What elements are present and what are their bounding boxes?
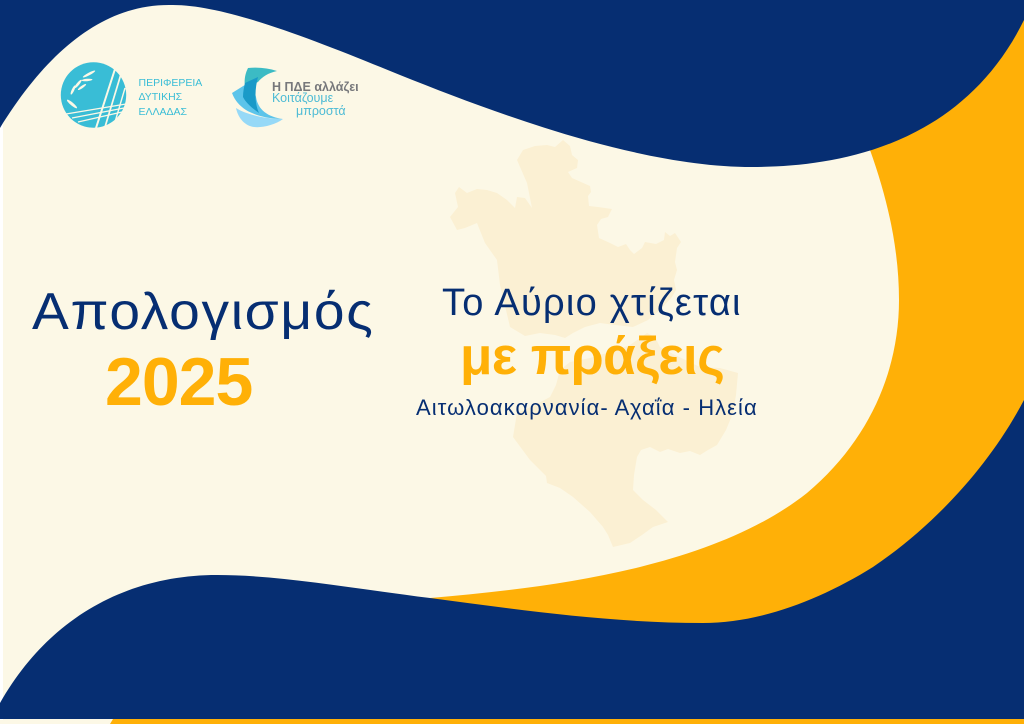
orange band — [430, 0, 1024, 660]
navy top wave — [0, 0, 1024, 167]
heading: 2025: 2025 — [105, 344, 252, 420]
text: logo slogan: Η ΠΔΕ αλλάζει — [272, 80, 359, 94]
text: region name: ΠΕΡΙΦΕΡΕΙΑ — [138, 76, 202, 88]
icon: round emblem — [60, 62, 126, 128]
navy bottom wave — [0, 400, 1024, 719]
text: logo subtitle: μπροστά — [296, 104, 346, 118]
heading: με πράξεις: με πράξεις — [460, 327, 724, 386]
text: region name — [138, 76, 202, 118]
heading: Απολογισμός: Απολογισμός — [32, 283, 374, 341]
map silhouette — [450, 140, 738, 547]
logo: Περιφέρεια Δυτικής Ελλάδας — [60, 62, 202, 128]
text: logo subtitle: Κοιτάζουμε — [272, 91, 333, 105]
text: regions: Αιτωλοακαρνανία- Αχαΐα - Ηλεία — [416, 395, 758, 420]
icon: sail — [232, 68, 283, 128]
text: region name: ΕΛΛΑΔΑΣ — [138, 106, 187, 118]
text: logo subtitle — [272, 91, 346, 118]
logo: Η ΠΔΕ αλλάζει — [232, 68, 359, 128]
heading: Το Αύριο χτίζεται: Το Αύριο χτίζεται — [442, 282, 742, 324]
text: region name: ΔΥΤΙΚΗΣ — [138, 91, 182, 103]
bottom orange strip — [110, 719, 1024, 724]
